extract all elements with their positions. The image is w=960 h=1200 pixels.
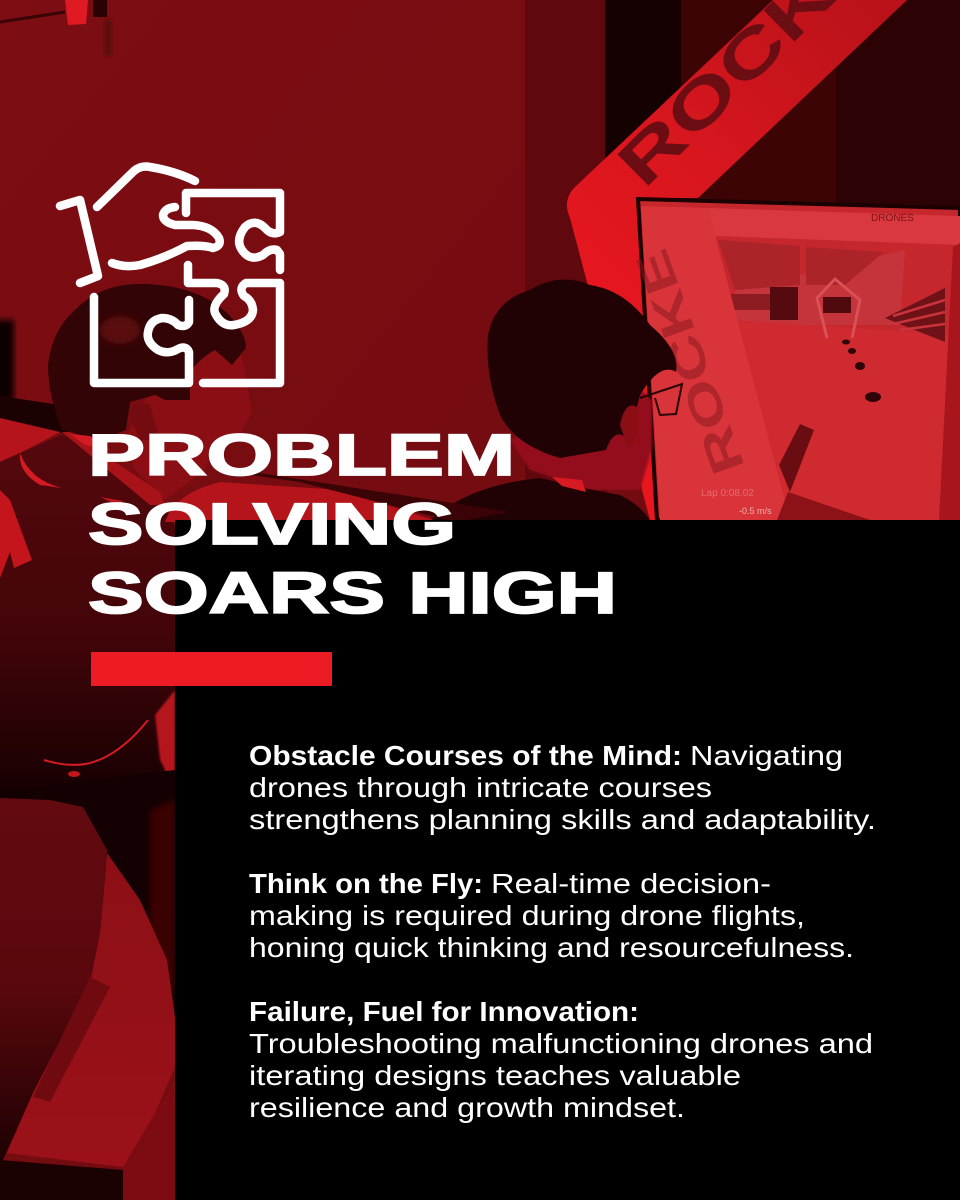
right boy [430,280,682,520]
collar [552,477,586,492]
monitor showing drone course: -0.5 m/s [739,506,772,516]
icon: cuff [60,200,98,283]
text block: Think on the Fly: Think on the Fly: [249,868,483,899]
ear [620,405,638,448]
black text panel [175,520,960,1200]
shoulder trim [20,453,62,488]
text block: Failure, Fuel for Innovation [249,996,873,1123]
text block: Failure, Fuel for Innovation: resilience and growth mindset. [249,1092,685,1123]
red accent bar [91,652,332,686]
monitor view: bleachers [885,288,945,342]
monitor view: dark wall strip [731,294,771,310]
shoulder [430,478,650,520]
face and neck [125,345,252,500]
monitor view: ceiling [708,208,960,245]
jersey [0,434,175,800]
monitor view: doors [770,287,798,320]
title: PROBLEM [88,423,515,488]
text block: Obstacle Courses of the Mind: Navigating [690,740,843,771]
text block: Think on the Fly: making is required during drone flights, [249,900,805,931]
icon: bottom right puzzle piece [188,265,280,383]
icon: top right puzzle piece [186,193,280,270]
jersey trim [44,690,175,790]
hair highlight [100,316,140,344]
bright shoulder [0,418,60,462]
title: SOLVING [88,492,456,557]
text block: Obstacle Courses of the Mind [249,740,876,835]
monitor view: floor [735,320,960,520]
text block: Think on the Fly: honing quick thinking and resourcefulness. [249,932,854,963]
text block: Think on the Fly: Real-time decision- [491,868,771,899]
monitor showing drone course: ROCKE [625,243,754,481]
dark band behind shoulder [0,396,70,435]
title: SOARS HIGH [88,561,617,626]
icon: puzzle pieces and hand [60,166,280,383]
title [88,423,617,626]
icon: hand top [97,166,195,207]
red sleeve in foreground [100,470,510,522]
hair [488,280,676,458]
collar [62,432,165,505]
text block: Failure, Fuel for Innovation: Troubleshooting malfunctioning drones and [249,1028,873,1059]
seated person's back and jacket [0,770,175,1200]
icon: finger [112,207,220,266]
text block: Obstacle Courses of the Mind: Obstacle Courses of the Mind: [249,740,682,771]
wall hook at top left [0,0,112,56]
icon: bottom left puzzle piece [94,297,189,383]
text block: Think on the Fly [249,868,854,963]
monitor view: right post [939,243,960,520]
monitor readout: Lap 0:08.02 [701,488,754,499]
hair [48,284,246,440]
jersey lettering [0,490,32,578]
text block: Obstacle Courses of the Mind: strengthens planning skills and adaptability. [249,804,876,835]
monitor sign: DRONES [871,213,914,224]
neck and face [510,380,652,490]
monitor view: roof panels [718,240,800,290]
monitor view: back wall [735,250,905,325]
left boy [0,284,252,800]
monitor view: inflatable gate band [641,206,790,520]
monitor showing drone course [625,199,960,520]
monitor view: dark tube [779,424,814,492]
monitor view: cones [842,340,881,402]
monitor view: pentagon gate [817,279,860,338]
text block: Failure, Fuel for Innovation: iterating designs teaches valuable [249,1060,741,1091]
glasses [640,384,682,415]
text block: Obstacle Courses of the Mind: drones through intricate courses [249,772,712,803]
inflatable arch with ROCK lettering: ROCK [603,0,848,200]
ear [129,403,160,440]
text block: Failure, Fuel for Innovation: Failure, Fuel for Innovation: [249,996,639,1027]
inflatable arch with ROCK lettering [567,0,907,525]
